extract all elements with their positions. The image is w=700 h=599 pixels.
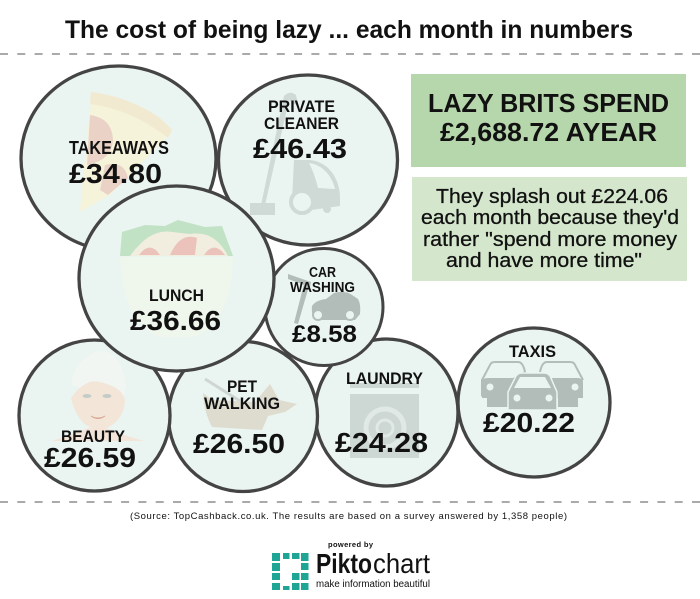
label: laundry: LAUNDRY (346, 369, 424, 388)
icon: vacuum cleaner (250, 93, 340, 215)
label: beauty: BEAUTY (61, 427, 126, 446)
icon: pizza slice (80, 92, 172, 212)
title: The cost of being lazy ... each month in numbers (65, 16, 633, 44)
piktochart branding (272, 540, 430, 590)
label: laundry: £24.28 (335, 427, 428, 458)
icon: taxis (482, 362, 583, 412)
label: takeaways: £34.80 (69, 158, 162, 189)
panel: pet walking (168, 342, 318, 492)
panel: laundry (315, 339, 458, 486)
label: pet walking (193, 377, 285, 459)
label: taxis: TAXIS (509, 342, 556, 361)
panel: taxis (458, 328, 610, 477)
label: pet walking: £26.50 (193, 428, 285, 459)
source note: (Source: TopCashback.co.uk. The results are based on a survey answered by 1,358 people) (130, 511, 567, 522)
panel: monthly spend (412, 177, 687, 281)
label: laundry (335, 369, 428, 458)
label: beauty: £26.59 (44, 442, 136, 473)
panel: beauty (19, 340, 170, 491)
label: car washing (290, 265, 357, 348)
panel: car washing (265, 248, 383, 366)
label: taxis: £20.22 (483, 407, 575, 438)
icon: woman with towel (52, 351, 144, 441)
icon: salad bowl (120, 220, 233, 337)
panel: monthly spend: and have more time" (446, 250, 642, 272)
panel: private cleaner (218, 75, 398, 245)
piktochart branding: chart (373, 548, 430, 579)
panel: lunch (79, 186, 274, 371)
panel: monthly spend: They splash out £224.06 (436, 186, 668, 208)
label: private cleaner: £46.43 (253, 133, 347, 164)
icon: left taxi (482, 362, 525, 407)
label: taxis (483, 342, 575, 438)
panel: takeaways (21, 66, 216, 251)
label: takeaways (69, 138, 169, 189)
label: pet walking: WALKING (204, 394, 280, 413)
label: lunch (130, 286, 221, 336)
label: car washing: WASHING (290, 280, 355, 296)
piktochart branding: make information beautiful (316, 579, 430, 590)
label: private cleaner: CLEANER (264, 114, 339, 133)
label: lunch: LUNCH (149, 286, 204, 305)
icon: centre taxi (505, 373, 557, 412)
panel: yearly spend (411, 74, 686, 167)
icon: washing machine (350, 383, 419, 458)
piktochart branding: powered by (328, 540, 374, 549)
label: lunch: £36.66 (130, 305, 221, 336)
piktochart branding: Pikto (316, 548, 372, 579)
label: private cleaner (253, 97, 347, 164)
panel: yearly spend: £2,688.72 AYEAR (440, 117, 657, 147)
icon: car wash (288, 274, 360, 324)
label: pet walking: PET (227, 377, 258, 396)
icon: right taxi (540, 362, 583, 407)
icon: piktochart logo (272, 553, 308, 590)
label: takeaways: TAKEAWAYS (69, 138, 169, 158)
label: car washing: £8.58 (292, 321, 357, 348)
label: beauty (44, 427, 136, 473)
panel: yearly spend: LAZY BRITS SPEND (428, 88, 669, 118)
label: car washing: CAR (309, 265, 336, 281)
panel: monthly spend: each month because they'd (421, 207, 679, 229)
icon: dog on a lead (203, 379, 297, 430)
label: private cleaner: PRIVATE (268, 97, 335, 116)
panel: monthly spend: rather "spend more money (423, 229, 677, 251)
